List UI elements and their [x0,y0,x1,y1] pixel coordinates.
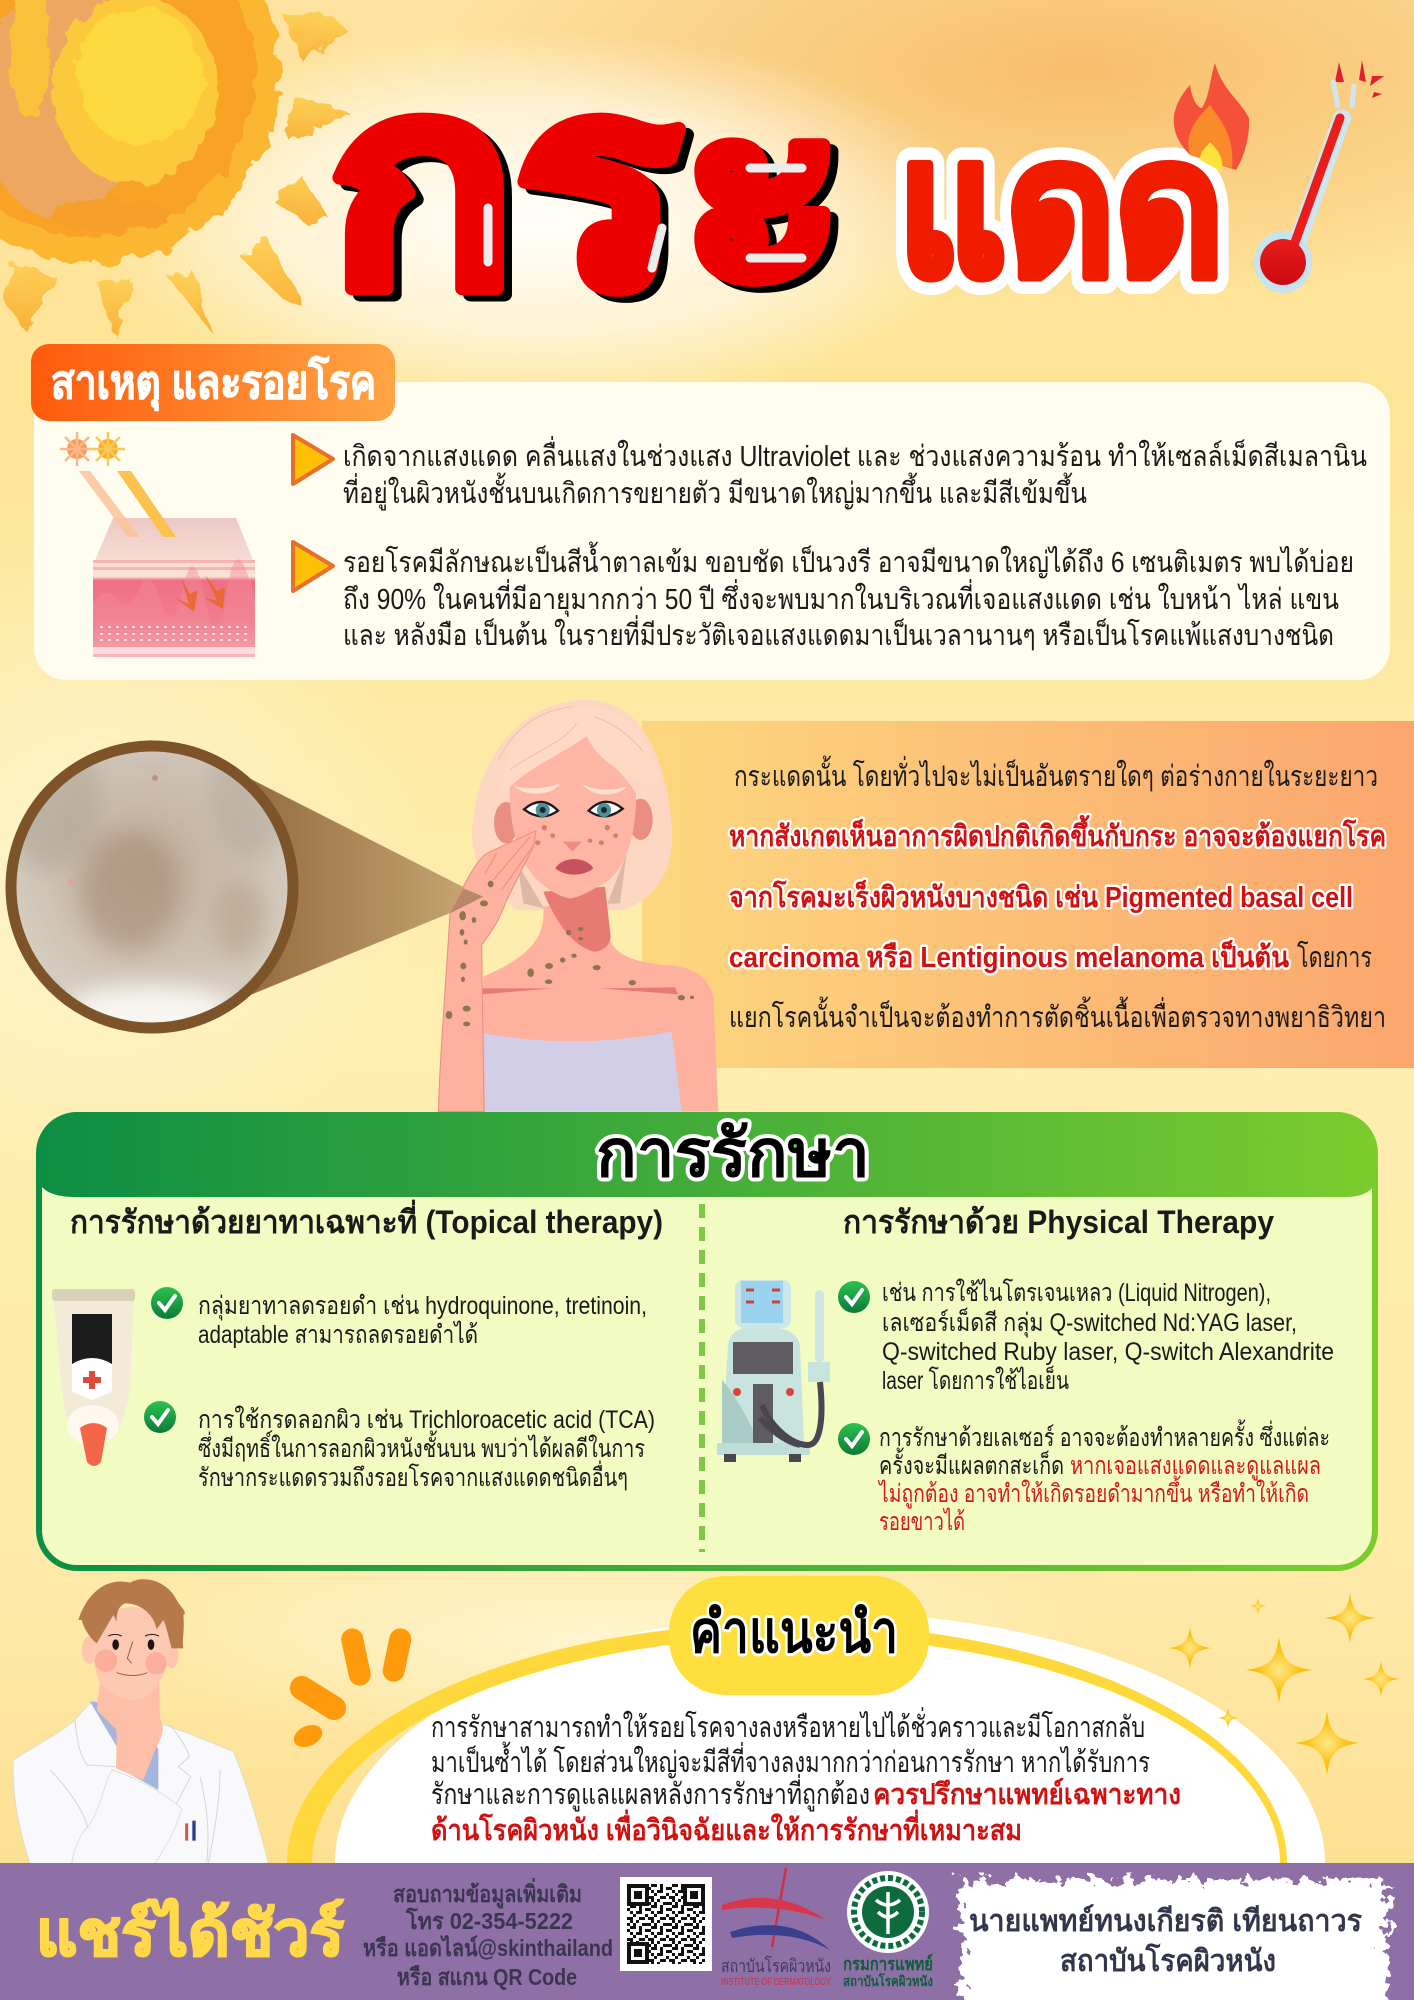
text block: advice: การรักษาสามารถทำให้รอยโรคจางลงหรือหายไปได้ชั่วคราวและมีโอกาสกลับ [431,1707,1145,1744]
advice yellow arc [287,1623,1287,1863]
panel: warning text background [642,721,1414,1068]
author brush block: สถาบันโรคผิวหนัง [1060,1942,1276,1978]
icon: flame [1174,63,1249,172]
sleeve [72,1770,182,1863]
text block: warning: carcinoma หรือ Lentiginous melanoma เป็นต้น [729,939,1289,974]
panel frame [39,1115,1375,1568]
arm and hand [438,831,536,1112]
icon: check 3 [838,1281,870,1313]
title word: กระ: กระ [329,27,846,345]
icon: check 1 [151,1287,183,1319]
text block: depigmenting: กลุ่มยาทาลดรอยดำ เช่น hydroquinone, tretinoin, [198,1292,647,1321]
icon: orange emphasis marks [285,1626,413,1751]
text block: laser warning: หากเจอแสงแดดและดูแลแผล [1070,1452,1321,1481]
column: topical therapy [52,1199,663,1492]
logo: institute of dermatology: สถาบันโรคผิวหนัง [721,1955,831,1976]
text block: cause [343,436,1367,511]
face [510,737,636,898]
text block: advice: ด้านโรคผิวหนัง เพื่อวินิจฉัยและให้การรักษาที่เหมาะสม [431,1809,1022,1847]
subheading: physical: การรักษาด้วย Physical Therapy [843,1204,1274,1240]
icon: watercolor sun [0,0,350,338]
contact info: หรือ แอดไลน์@skinthailand [363,1934,613,1961]
sun spots [446,825,694,1026]
hair back [472,700,672,910]
text block: peeling [198,1405,655,1492]
neck [97,1683,160,1730]
icon: skin layers with UV rays [60,432,255,657]
text block: nitrogen and laser [882,1278,1334,1395]
hand [116,1698,163,1780]
bullet arrow 2 [293,542,333,591]
advice heading pill [669,1576,929,1695]
photo: magnified skin lesion [0,720,293,1045]
illustration: doctor [13,1579,268,1863]
text block: nitrogen and laser: เลเซอร์เม็ดสี กลุ่ม Q-switched Nd:YAG laser, [882,1307,1297,1338]
icon: sparkles [1169,1593,1399,1775]
panel: advice [287,1576,1325,1863]
panel: causes [31,344,1390,680]
contact info: หรือ สแกน QR Code [397,1964,577,1990]
coat [13,1700,268,1863]
logo: department of medical services: กรมการแพทย์ [843,1953,933,1974]
text block: laser warning [877,1419,1330,1536]
QR code [620,1877,712,1971]
ears [494,802,518,843]
text block: lesion description [343,541,1354,652]
text block: cause: ที่อยู่ในผิวหนังชั้นบนเกิดการขยายตัว มีขนาดใหญ่มากขึ้น และมีสีเข้มขึ้น [343,472,1087,511]
face [92,1607,170,1700]
logo: institute of dermatology: INSTITUTE OF DERMATOLOGY [721,1977,831,1988]
text block: peeling: การใช้กรดลอกผิว เช่น Trichloroacetic acid (TCA) [198,1405,655,1434]
torso [480,900,718,1112]
ears [82,1636,97,1664]
text block: laser warning: ครั้งจะมีแผลตกสะเก็ด [879,1447,1064,1480]
callout: magnifier cone [150,740,483,1030]
subheading: topical: การรักษาด้วยยาทาเฉพาะที่ (Topical therapy) [70,1199,663,1240]
contact info [363,1877,613,1990]
text block: depigmenting: adaptable สามารถลดรอยดำได้ [198,1320,478,1349]
advice heading pill: คำแนะนำ [690,1600,898,1665]
heading tag: causes: สาเหตุ และรอยโรค [51,355,376,411]
icon: cream tube [52,1289,135,1466]
eyes [524,802,558,816]
author brush block [962,1880,1388,2000]
bullet arrow 1 [293,435,333,484]
footer slogan: แชร์ได้ชัวร์ [36,1898,344,1969]
pens [182,1823,191,1841]
hair front [502,707,660,797]
brows [514,783,627,795]
logo: department of medical services [843,1871,933,1989]
heading: treatment: การรักษา [596,1116,870,1190]
text block: peeling: ซึ่งมีฤทธิ์ในการลอกผิวหนังชั้นบน พบว่าได้ผลดีในการ [198,1430,645,1463]
contact info: โทร 02-354-5222 [405,1907,573,1934]
coat lapels [50,1720,220,1863]
footer bar [0,1863,1414,2000]
text block: warning [729,755,1386,1034]
title word: แดด: แดด [898,103,1224,315]
text block: advice: มาเป็นซ้ำได้ โดยส่วนใหญ่จะมีสีที่จางลงมากกว่าก่อนการรักษา หากได้รับการ [431,1741,1150,1779]
text block: advice [431,1707,1181,1847]
divider [699,1204,705,1552]
nose and mouth [563,842,582,852]
panel background [34,382,1390,680]
column: physical therapy [717,1204,1334,1536]
contact info: สอบถามข้อมูลเพิ่มเติม [393,1877,582,1909]
shirt [90,1702,158,1790]
author brush block: นายแพทย์ทนงเกียรติ เทียนถาวร [969,1904,1362,1938]
icon: laser machine [717,1280,830,1462]
panel header [36,1112,1378,1197]
logo: institute of dermatology [721,1868,831,1988]
text block: depigmenting [198,1292,647,1349]
icon: check 4 [838,1423,870,1455]
text block: warning: โดยการ [1297,940,1372,974]
hair [78,1579,185,1648]
heading tag: causes [31,344,395,421]
logo: department of medical services: สถาบันโรคผิวหนัง [843,1972,933,1989]
top [484,1032,682,1112]
illustration: woman with sun spots [438,700,718,1112]
icon: thermometer [1254,60,1384,293]
text block: nitrogen and laser: Q-switched Ruby laser, Q-switch Alexandrite [882,1338,1334,1366]
icon: check 2 [144,1401,176,1433]
text block: peeling: รักษากระแดดรวมถึงรอยโรคจากแสงแดดชนิดอื่นๆ [198,1460,628,1492]
title word: แดด: แดด [898,103,1224,315]
text block: advice: ควรปรึกษาแพทย์เฉพาะทาง [873,1777,1181,1811]
collarbones [482,987,678,994]
text block: laser warning: รอยขาวได้ [879,1507,965,1536]
advice white arch [335,1613,1325,1863]
text block: nitrogen and laser: laser โดยการใช้ไอเย็น [882,1365,1069,1395]
title: กระ แดด [329,27,1224,351]
title word: กระ: กระ [337,33,854,351]
text block: nitrogen and laser: เช่น การใช้ไนโตรเจนเหลว (Liquid Nitrogen), [882,1278,1271,1307]
text block: advice: รักษาและการดูแลแผลหลังการรักษาที่ถูกต้อง [431,1774,870,1812]
neck shadow [543,887,611,952]
panel: treatment [36,1112,1378,1568]
